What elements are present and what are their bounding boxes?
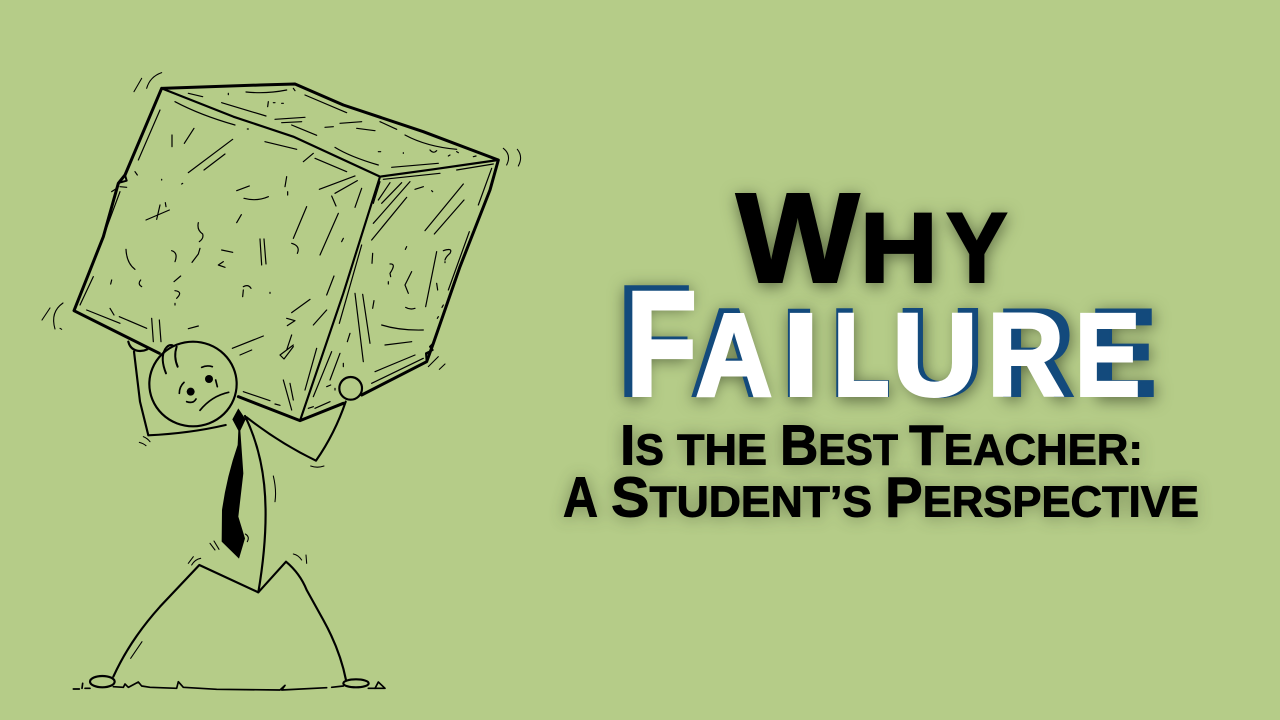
subtitle line 2: STUDENT’S xyxy=(611,466,872,530)
cube notch at corner xyxy=(119,175,433,362)
hair xyxy=(163,345,178,373)
white layer: F xyxy=(626,260,697,428)
blue offset layer xyxy=(617,254,1156,430)
title: Why xyxy=(736,167,1008,310)
subtitle line 1: TEACHER: xyxy=(909,414,1143,478)
cube outline xyxy=(74,84,498,421)
motion marks on body xyxy=(131,437,324,658)
subtitle line 2: PERSPECTIVE xyxy=(885,466,1199,530)
head xyxy=(149,342,237,426)
blue offset layer: U xyxy=(897,284,984,422)
subtitle line 1: THE xyxy=(677,426,767,474)
subtitle line 1: BEST xyxy=(780,414,898,478)
white layer: E xyxy=(1075,290,1140,422)
title: Failure xyxy=(617,254,1156,430)
blue offset layer: L xyxy=(831,284,891,422)
white layer: A xyxy=(696,290,772,422)
face xyxy=(179,366,229,410)
right arm xyxy=(238,397,346,461)
subtitle line 1 xyxy=(620,414,1143,478)
blue offset layer: I xyxy=(781,284,817,422)
right hand xyxy=(339,377,362,400)
blue offset layer: R xyxy=(997,284,1074,422)
white layer xyxy=(626,260,1140,428)
white layer: L xyxy=(833,290,890,422)
white layer: R xyxy=(987,290,1064,422)
cube xyxy=(60,73,521,421)
subtitle line 1: IS xyxy=(620,414,664,478)
blue offset layer: A xyxy=(690,284,768,422)
stick man xyxy=(73,342,385,690)
tie xyxy=(222,408,246,559)
left arm and hand xyxy=(128,342,226,435)
blue offset layer: F xyxy=(617,254,692,430)
left motion marks beside cube xyxy=(42,303,63,329)
cube scratch texture xyxy=(80,88,493,410)
cube right face scratches xyxy=(355,168,492,383)
white layer: U xyxy=(892,290,978,422)
legs xyxy=(113,562,346,680)
subtitle line 2: A xyxy=(563,466,598,530)
title: Why: Y xyxy=(946,192,1008,303)
feet xyxy=(90,676,115,687)
blue offset layer: E xyxy=(1090,284,1156,422)
white layer: I xyxy=(783,290,819,422)
torso xyxy=(245,416,266,592)
subtitle line 2 xyxy=(563,466,1199,530)
title: Why: W xyxy=(736,167,860,310)
illustration: stick man carrying a heavy cube xyxy=(42,73,521,690)
ground xyxy=(73,682,385,690)
title: Why: H xyxy=(860,192,938,303)
cube inner edges xyxy=(162,88,498,421)
motion marks xyxy=(60,73,521,369)
